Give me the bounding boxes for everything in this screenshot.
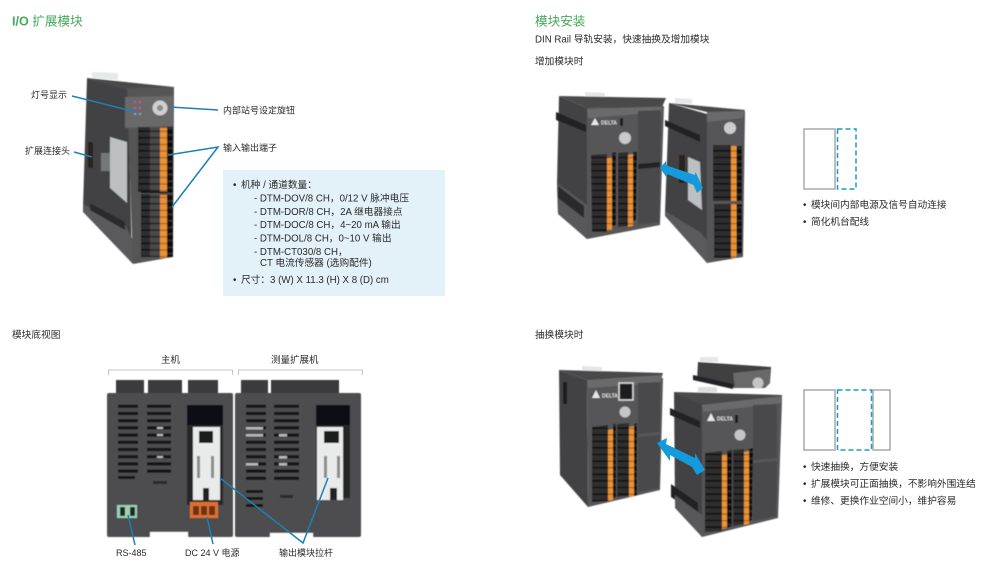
panel: model list and dimensions: - DTM-DOL/8 CH，0~10 V 输出 xyxy=(254,232,392,244)
list: add module benefits: • xyxy=(803,200,807,211)
group label: main unit xyxy=(108,354,232,375)
list: add module benefits: 模块间内部电源及信号自动连接 xyxy=(811,198,947,211)
title: module installation: 模块安装 xyxy=(535,14,586,28)
panel: model list and dimensions: CT 电流传感器 (选购配件) xyxy=(260,256,372,269)
heading: swapping a module: 抽换模块时 xyxy=(535,328,584,341)
panel: model list and dimensions: - DTM-CT030/8 CH， xyxy=(254,247,348,258)
arrow: swap module xyxy=(657,438,705,475)
illustration: front main unit xyxy=(670,392,782,537)
list: swap module benefits: • xyxy=(803,479,807,490)
callout: I/O terminals xyxy=(168,142,277,207)
list: swap module benefits xyxy=(803,460,976,507)
callout: RS-485: RS-485 xyxy=(116,548,147,558)
description: DIN rail: DIN Rail 导轨安装，快速抽换及增加模块 xyxy=(535,32,710,46)
panel: model list and dimensions: 尺寸：3 (W) X 11.3 (H) X 8 (D) cm xyxy=(241,273,389,286)
arrow: insert module xyxy=(660,161,703,193)
callout: LED display xyxy=(31,90,136,112)
callout: output module lever xyxy=(220,478,333,558)
callout: DC 24 V power: DC 24 V 电源 xyxy=(185,547,240,558)
illustration: main unit, swapping a module: DELTA xyxy=(602,394,618,400)
panel: model list and dimensions: • xyxy=(233,275,237,286)
callout: I/O terminals: 输入输出端子 xyxy=(223,142,277,153)
diagram: add module slots xyxy=(804,129,856,189)
panel: model list and dimensions xyxy=(223,170,445,296)
list: swap module benefits: • xyxy=(803,496,807,507)
panel: model list and dimensions: - DTM-DOC/8 CH，4~20 mA 输出 xyxy=(254,218,401,231)
callout: station rotary switch xyxy=(170,104,295,116)
panel: model list and dimensions: • xyxy=(233,180,237,191)
panel: model list and dimensions: - DTM-DOV/8 CH，0/12 V 脉冲电压 xyxy=(254,192,409,204)
illustration: front main unit: DELTA xyxy=(717,416,733,422)
illustration: main unit, swapping a module xyxy=(559,366,663,507)
group label: measurement expansion unit xyxy=(238,354,362,375)
heading: adding a module: 增加模块时 xyxy=(535,54,584,68)
list: swap module benefits: 维修、更换作业空间小，维护容易 xyxy=(811,494,956,507)
list: add module benefits: • xyxy=(803,217,807,228)
heading: bottom view: 模块底视图 xyxy=(12,328,60,341)
list: swap module benefits: • xyxy=(803,462,807,473)
list: add module benefits: 简化机台配线 xyxy=(811,215,869,228)
list: swap module benefits: 扩展模块可正面抽换，不影响外围连结 xyxy=(811,477,976,490)
group label: measurement expansion unit: 测量扩展机 xyxy=(271,354,319,366)
group label: main unit: 主机 xyxy=(161,354,181,366)
list: swap module benefits: 快速抽换，方便安装 xyxy=(811,460,898,473)
callout: station rotary switch: 内部站号设定旋钮 xyxy=(223,104,295,116)
panel: model list and dimensions: 机种 / 通道数量： xyxy=(241,178,317,191)
illustration: bottom view of main unit and expansion xyxy=(107,380,361,538)
panel: model list and dimensions: - DTM-DOR/8 CH，2A 继电器接点 xyxy=(254,205,403,218)
callout: expansion connector: 扩展连接头 xyxy=(25,145,70,156)
illustration: main unit, adding a module xyxy=(556,92,666,239)
callout: expansion connector xyxy=(25,145,92,157)
callout: output module lever: 输出模块拉杆 xyxy=(279,547,333,558)
diagram: swap module slots xyxy=(804,390,890,450)
illustration: main unit, adding a module: DELTA xyxy=(601,120,617,126)
callout: LED display: 灯号显示 xyxy=(31,90,67,100)
title: I/O expansion module: I/O 扩展模块 xyxy=(12,14,83,28)
illustration: expansion module being added xyxy=(665,98,745,263)
illustration: I/O expansion module xyxy=(83,72,174,264)
callout: DC 24 V power xyxy=(185,517,240,558)
illustration: swapped module behind xyxy=(693,357,771,392)
list: add module benefits xyxy=(803,198,947,228)
callout: RS-485 xyxy=(116,515,147,558)
